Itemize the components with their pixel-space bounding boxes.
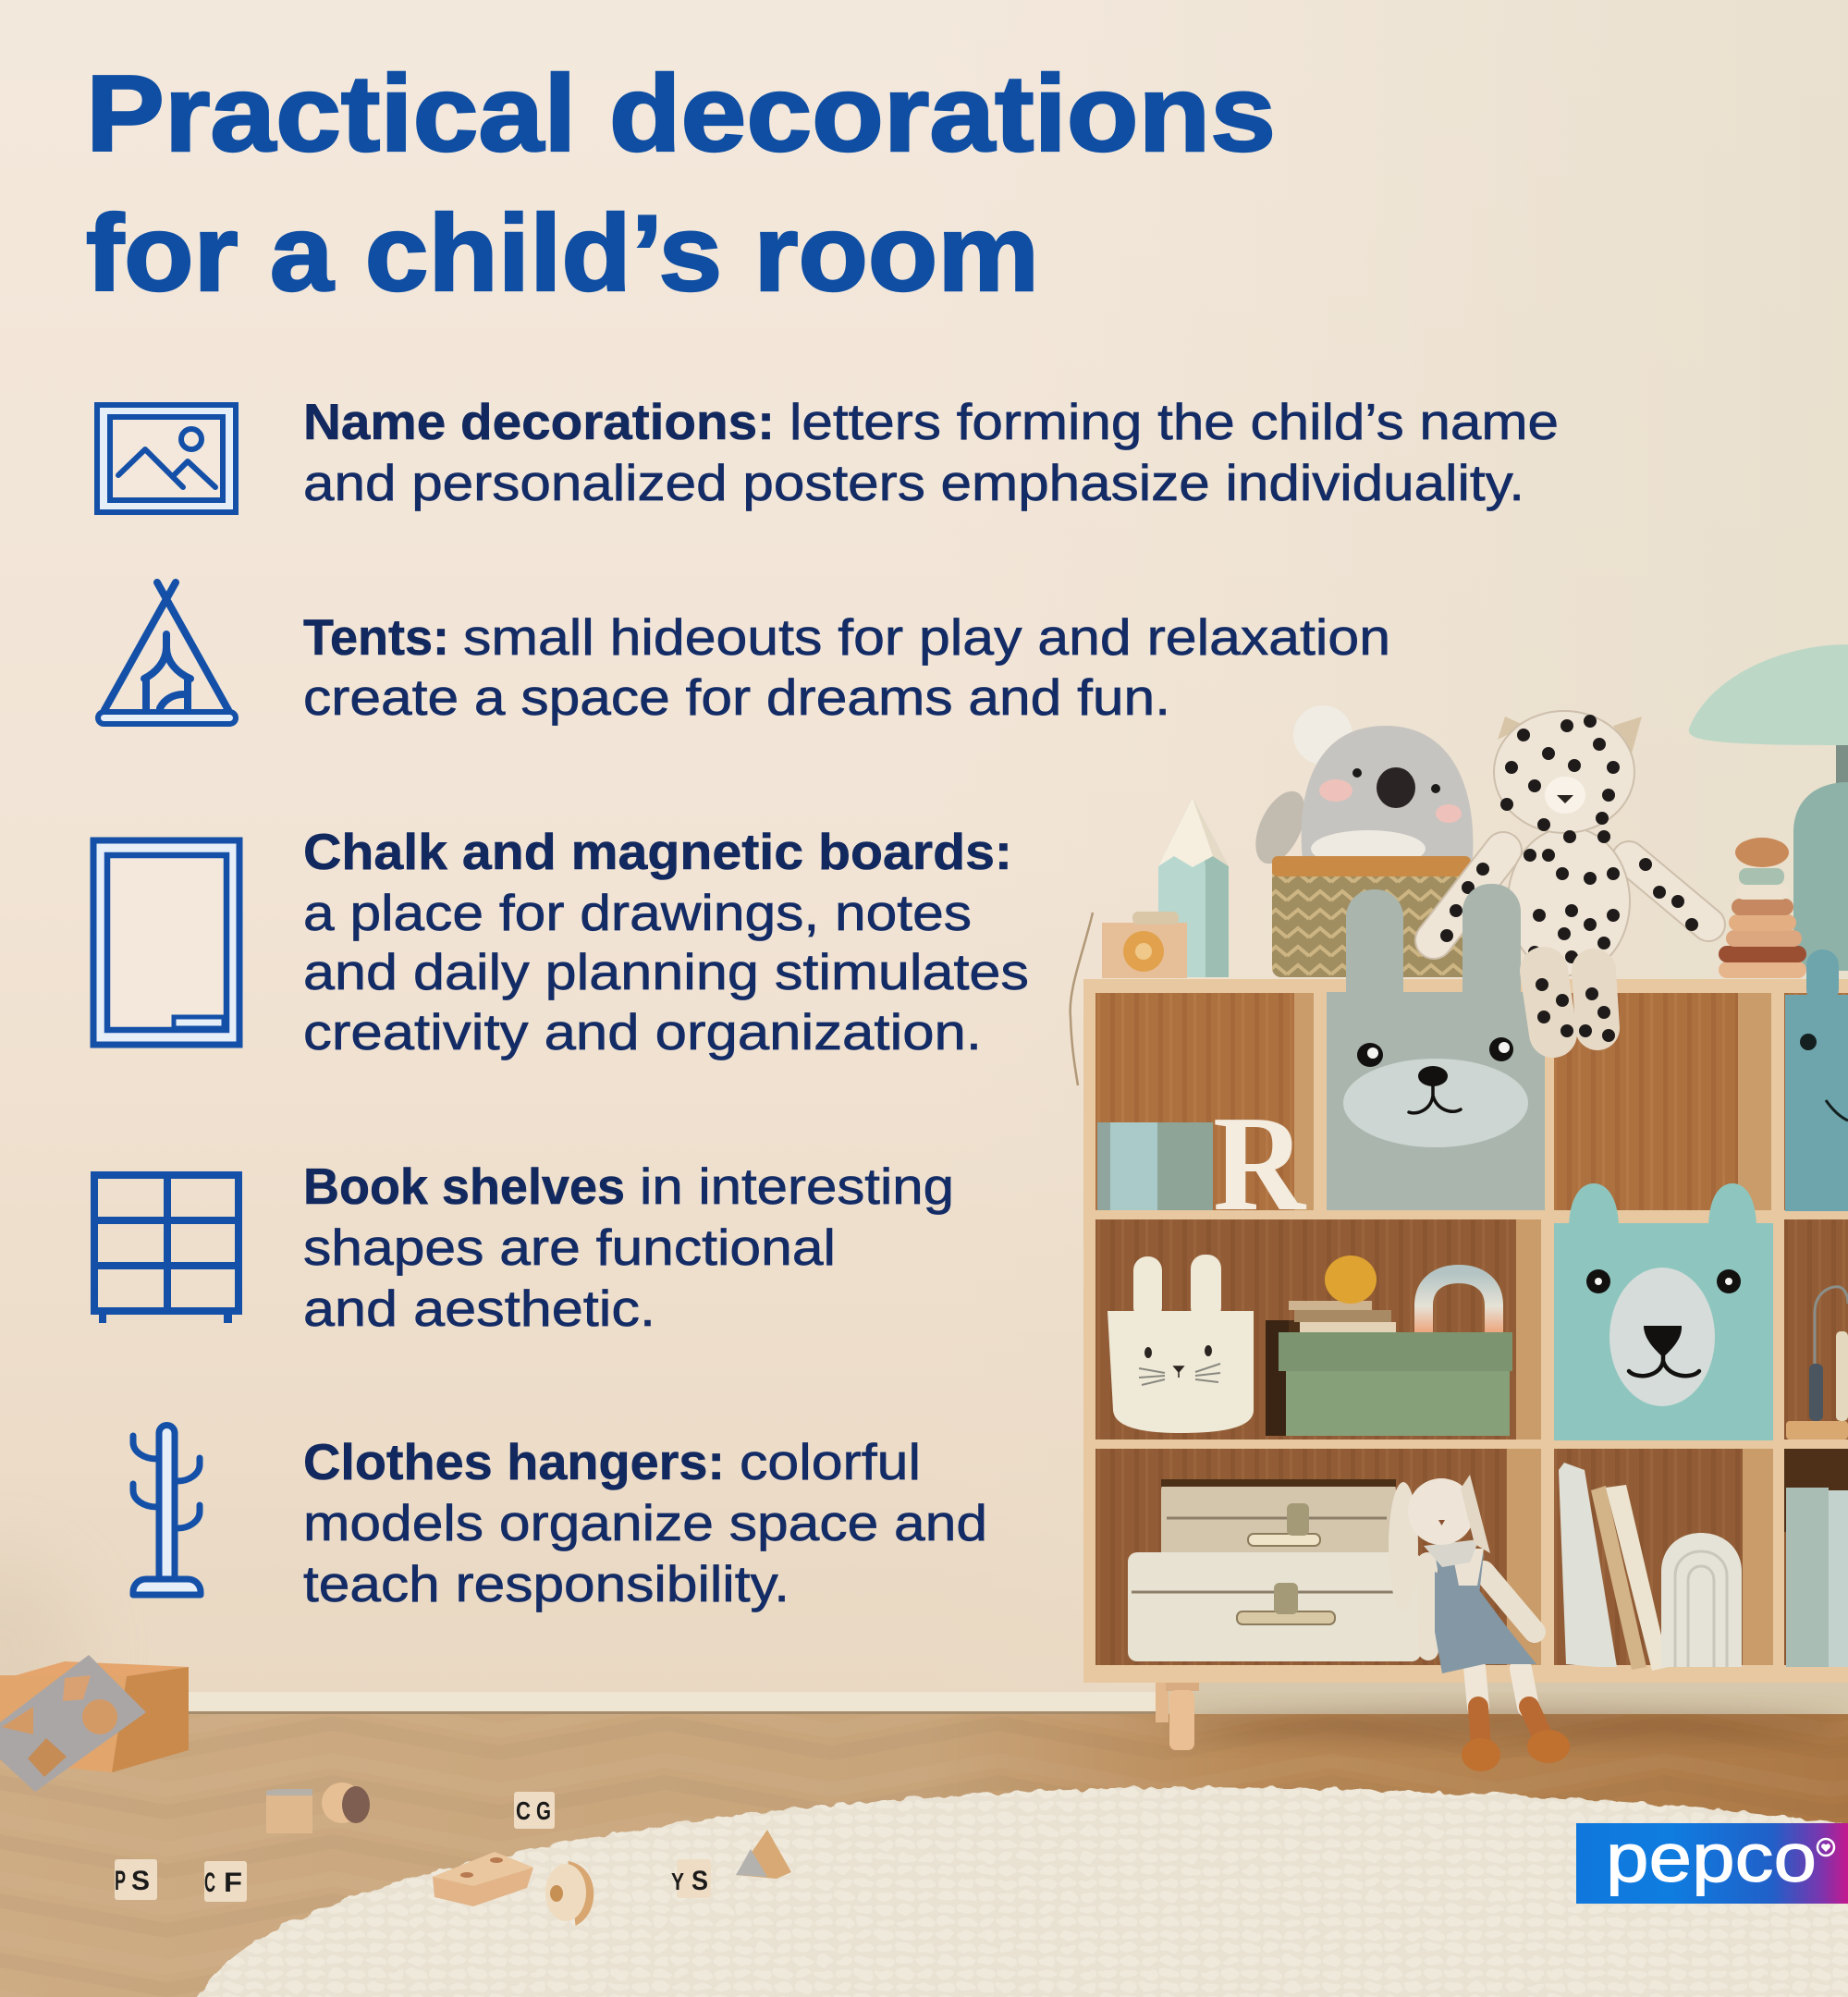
title: Practical decorations	[86, 53, 1276, 174]
folders on the right shelf	[1786, 1488, 1848, 1667]
text: clothes hangers: colorful	[740, 1433, 921, 1490]
storage box: grey bunny	[1327, 884, 1545, 1210]
letter cube P S: S	[131, 1866, 150, 1896]
leopard plush: hanging legs	[1542, 971, 1609, 1035]
icon: coat rack	[133, 1426, 201, 1595]
pencil decoration	[1158, 798, 1229, 977]
block with holes	[433, 1852, 533, 1906]
letter cube C F: C	[204, 1868, 215, 1898]
text: chalk and magnetic boards: creativity and organization.	[303, 1003, 982, 1060]
round knit rug	[191, 1787, 1848, 1997]
text: book shelves	[303, 1158, 954, 1337]
abacus toy	[1786, 1287, 1848, 1440]
text: tents: small hideouts for play and relaxation	[463, 608, 1390, 666]
title	[86, 53, 1276, 313]
wooden stacking toy	[1719, 838, 1806, 978]
text: tents: Tents:	[303, 608, 449, 666]
rectangular block	[266, 1789, 312, 1833]
text: clothes hangers: Clothes hangers:	[303, 1433, 725, 1490]
title: for a child’s room	[86, 192, 1039, 313]
letter cube C F: F	[224, 1868, 242, 1898]
item: chalk and magnetic boards	[93, 823, 1029, 1060]
letter cube Y S: Y	[671, 1868, 684, 1895]
text: name decorations: Name decorations:	[303, 393, 775, 450]
objects on shelf top	[1071, 644, 1848, 1085]
text: name decorations: letters forming the child’s name	[789, 393, 1559, 450]
pepco logo	[1576, 1819, 1848, 1904]
woven basket	[1272, 856, 1471, 977]
shelf plinth and legs	[1156, 1678, 1848, 1750]
koala plush	[1245, 705, 1473, 871]
bunny doll	[1389, 1475, 1570, 1771]
letter cube C: G	[536, 1796, 551, 1825]
text: tents: create a space for dreams and fun.	[303, 668, 1170, 726]
letter cube Y S	[671, 1859, 711, 1898]
ribbed arch ornament	[1661, 1533, 1742, 1667]
letter cube Y S: S	[691, 1866, 708, 1896]
baseboard	[0, 1692, 1848, 1714]
text: name decorations: and personalized posters emphasize individuality.	[303, 454, 1524, 511]
item: clothes hangers	[133, 1426, 987, 1612]
books	[1559, 1463, 1669, 1671]
text: tents	[303, 608, 1390, 726]
cylinder block	[322, 1783, 370, 1823]
item: book shelves	[94, 1158, 954, 1337]
text: name decorations	[303, 393, 1559, 511]
storage box: teal bear	[1554, 1183, 1773, 1440]
text: clothes hangers	[303, 1433, 987, 1612]
wooden shelf unit	[1071, 644, 1848, 1771]
leopard plush: arms and body	[1434, 711, 1708, 975]
suitcases	[1128, 1479, 1421, 1661]
letter cube C F	[204, 1861, 247, 1902]
text: book shelves: in interesting	[640, 1158, 954, 1215]
text: chalk and magnetic boards	[303, 823, 1029, 1060]
text: book shelves: Book shelves	[303, 1158, 625, 1215]
text: chalk and magnetic boards: Chalk and magnetic boards:	[303, 823, 1012, 880]
storage box: blue edge	[1785, 949, 1848, 1211]
half disc block	[545, 1864, 591, 1921]
shelf frame	[1083, 979, 1848, 1683]
text: book shelves: shapes are functional	[303, 1219, 836, 1276]
wooden blocks on the floor and rug	[115, 1783, 791, 1921]
triangular block	[736, 1830, 791, 1879]
letter cube P S	[115, 1859, 157, 1900]
text: clothes hangers: teach responsibility.	[303, 1555, 789, 1612]
pepco logo: pepco	[1606, 1819, 1817, 1896]
letter cube C	[514, 1792, 555, 1829]
green gift box with books, yarn ball and arch	[1266, 1256, 1512, 1436]
text: chalk and magnetic boards: a place for drawings, notes	[303, 884, 972, 941]
text: clothes hangers: models organize space and	[303, 1494, 987, 1551]
herringbone wooden floor	[0, 1714, 1848, 1997]
shelf back panels	[1095, 993, 1848, 1665]
text: book shelves: and aesthetic.	[303, 1280, 655, 1337]
toy camera	[1071, 912, 1187, 1085]
grey shape board	[0, 1655, 146, 1792]
icon: board	[93, 840, 239, 1045]
block and letter R	[1097, 1088, 1307, 1240]
block and letter R: R	[1213, 1088, 1307, 1240]
rabbit fabric basket	[1108, 1255, 1254, 1433]
item: tents	[98, 582, 1390, 726]
text: chalk and magnetic boards: and daily planning stimulates	[303, 943, 1029, 1000]
letter cube P S: P	[115, 1866, 126, 1896]
icon: teepee tent	[98, 582, 236, 724]
letter cube C: C	[516, 1796, 531, 1825]
icon: shelf unit	[94, 1175, 239, 1323]
icon: framed picture	[97, 405, 236, 512]
wooden shape sorter box	[0, 1655, 189, 1792]
item: name decorations	[97, 393, 1559, 512]
lamp	[1689, 644, 1848, 971]
